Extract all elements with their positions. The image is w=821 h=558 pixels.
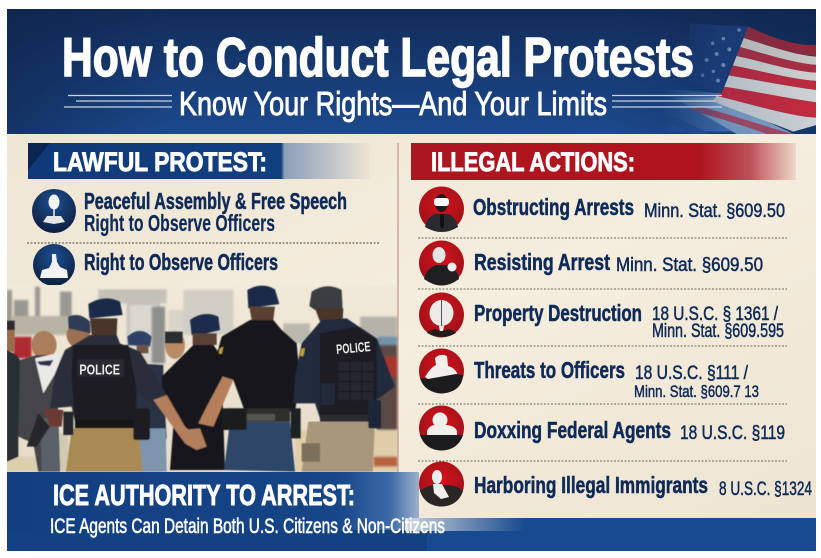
heading bar: illegal actions: ILLEGAL ACTIONS: (431, 147, 635, 177)
row: property destruction: 18 U.S.C. § 1361 / (652, 304, 779, 325)
row: harboring illegal immigrants: Harboring Illegal Immigrants (474, 472, 708, 498)
text: peaceful assembly: Peaceful Assembly & Free Speech (84, 188, 347, 214)
police labels: POLICE (336, 339, 371, 357)
heading bar: lawful protest: LAWFUL PROTEST: (53, 147, 267, 177)
header banner (7, 9, 817, 134)
panel: paper background (7, 134, 816, 551)
footer: ICE authority (7, 472, 816, 551)
heading bar: lawful protest (28, 143, 370, 179)
city background (7, 287, 397, 472)
police labels: POLICE (79, 362, 120, 378)
officer 1 (88, 298, 123, 318)
row: resisting arrest: Minn. Stat. §609.50 (616, 255, 763, 276)
row: doxxing federal agents: 18 U.S.C. §119 (680, 423, 785, 444)
row: obstructing arrests (419, 186, 785, 232)
heading bar: illegal actions (411, 143, 796, 180)
panel: lawful protest (28, 143, 370, 286)
icon: assembly (32, 189, 76, 233)
officer 3 (247, 286, 279, 308)
row: threats to officers: 18 U.S.C. §111 / (635, 363, 749, 384)
row: threats to officers: Threats to Officers (474, 357, 625, 383)
row: threats to officers (419, 348, 759, 401)
heading: ICE authority: ICE AUTHORITY TO ARREST: (53, 480, 355, 512)
icon: American flag (672, 24, 816, 134)
photo: police officers (7, 285, 398, 472)
row: harboring illegal immigrants (419, 462, 812, 506)
row: resisting arrest (419, 240, 763, 286)
decorative rules (64, 96, 722, 107)
officer 4 (309, 286, 343, 310)
officer 2 (190, 314, 220, 335)
bystanders (7, 321, 15, 330)
row: resisting arrest: Resisting Arrest (474, 249, 610, 275)
text: right to observe: Right to Observe Officers (84, 249, 278, 275)
row: doxxing federal agents (419, 406, 785, 450)
panel: illegal actions (411, 143, 812, 506)
row: doxxing federal agents: Doxxing Federal Agents (474, 417, 671, 443)
icon: observe officers (33, 244, 75, 286)
row: obstructing arrests: Obstructing Arrests (473, 194, 634, 220)
row: threats to officers: Minn. Stat. §609.7 13 (634, 382, 759, 401)
row: obstructing arrests: Minn. Stat. §609.50 (644, 201, 785, 222)
subtitle: Know Your Rights—And Your Limits (179, 85, 607, 122)
row: property destruction (419, 292, 784, 342)
text: ICE agents: ICE Agents Can Detain Both U.S. Citizens & Non-Citizens (50, 515, 445, 538)
text: peaceful assembly (84, 188, 347, 236)
text: peaceful assembly: Right to Observe Officers (84, 210, 275, 236)
police labels (80, 342, 370, 374)
row: property destruction: Property Destruction (474, 300, 642, 326)
